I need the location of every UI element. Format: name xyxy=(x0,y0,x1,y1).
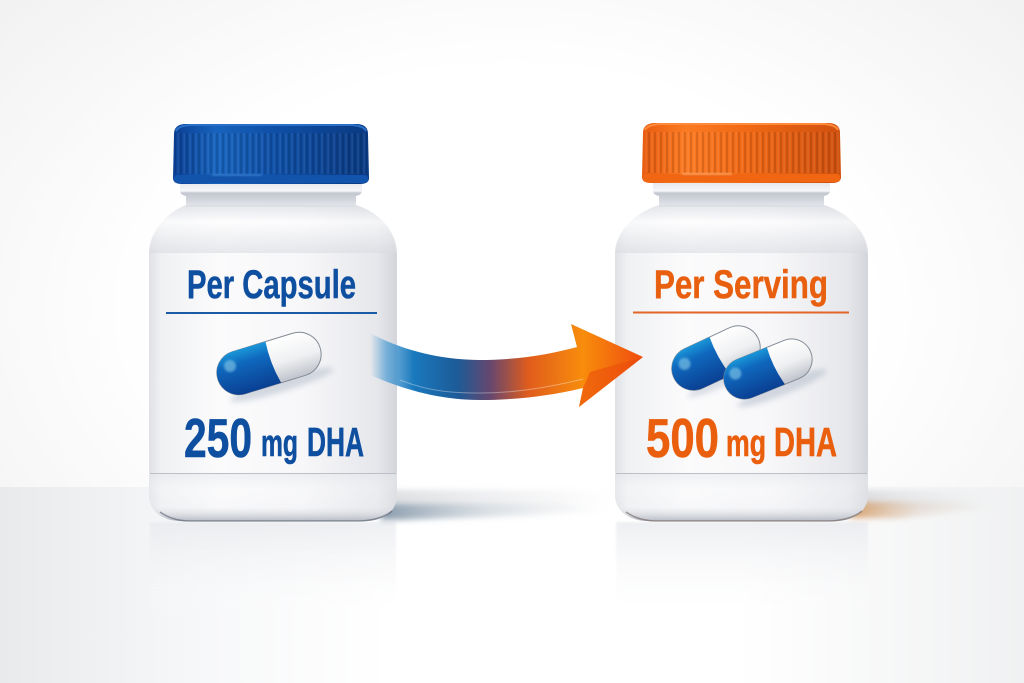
value: 250 mg DHA: DHA xyxy=(307,419,364,465)
bottle body xyxy=(149,186,397,521)
icon: capsule front xyxy=(718,330,829,414)
value: 250 mg DHA xyxy=(184,407,364,469)
value: 500 mg DHA: 500 xyxy=(646,407,719,469)
bottle shoulder xyxy=(615,205,868,253)
value: 500 mg DHA: mg xyxy=(726,423,766,465)
value: 500 mg DHA xyxy=(646,407,837,469)
bottle base xyxy=(615,473,868,521)
value: 250 mg DHA: mg xyxy=(261,423,298,465)
icon: capsule xyxy=(211,325,335,409)
heading: per serving: Per Serving xyxy=(654,263,828,307)
divider line xyxy=(166,312,377,314)
orange cap xyxy=(642,123,841,183)
bottle body xyxy=(615,186,868,521)
bottle contact shadow xyxy=(626,511,862,521)
value: 500 mg DHA: DHA xyxy=(774,419,837,465)
shadow: blue bottle xyxy=(380,490,620,520)
shadow: orange bottle xyxy=(850,490,1000,518)
value: 250 mg DHA: 250 xyxy=(184,407,252,469)
label edge lines xyxy=(150,472,396,474)
bottle base xyxy=(149,473,397,521)
blue cap xyxy=(173,124,369,184)
bottle shoulder xyxy=(149,205,397,253)
bottle: per serving xyxy=(615,123,868,521)
arrow: per capsule to per serving xyxy=(370,324,643,407)
bottle contact shadow xyxy=(160,511,392,521)
icon: capsule back xyxy=(665,317,774,404)
bottle: per capsule xyxy=(149,124,397,521)
bottle neck xyxy=(180,182,362,207)
divider line xyxy=(633,312,849,314)
bottle neck xyxy=(653,182,830,207)
reflections under bottles xyxy=(150,522,868,622)
label edge lines xyxy=(616,472,867,474)
heading: per capsule: Per Capsule xyxy=(187,263,356,307)
